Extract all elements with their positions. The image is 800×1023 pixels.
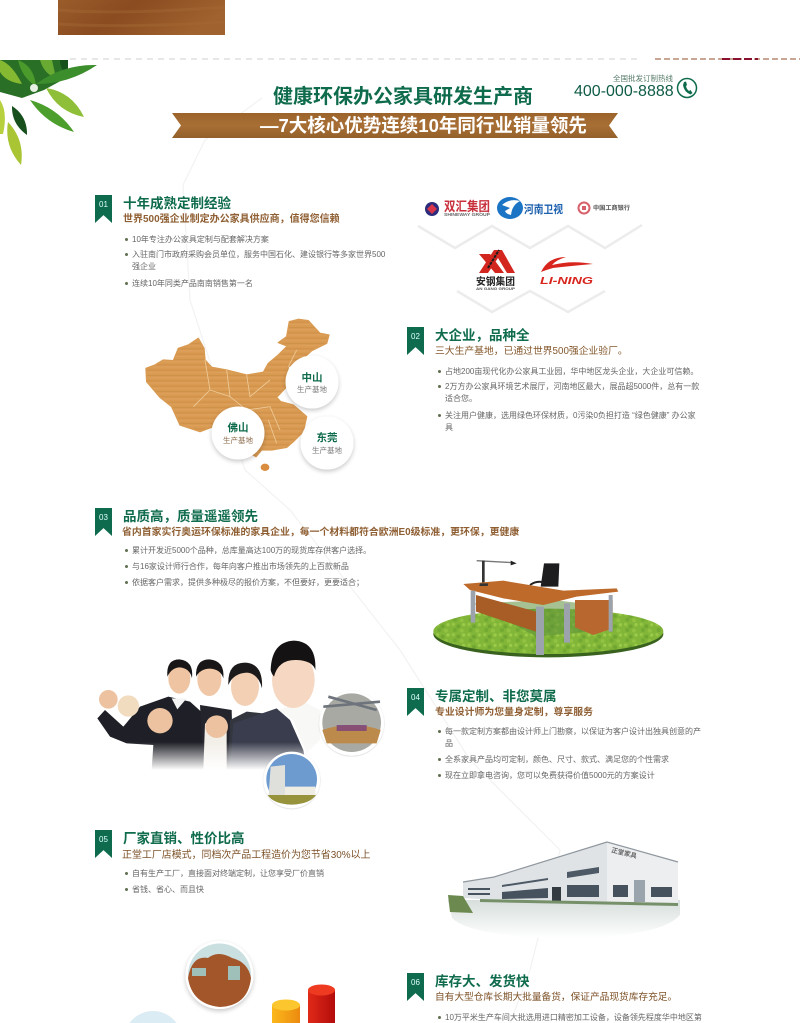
connecting line	[183, 98, 560, 1023]
circle: Zhongshan	[286, 356, 338, 408]
section 02	[407, 327, 699, 432]
logo: ICBC	[578, 202, 630, 214]
factory building	[448, 842, 680, 938]
circle: Dongguan	[300, 416, 354, 470]
hotline	[574, 74, 674, 100]
faces	[167, 641, 315, 708]
hexagon logo wall	[418, 197, 642, 312]
text: 具	[445, 423, 453, 432]
logo: Li-Ning	[540, 257, 593, 287]
section 02: 适合您。	[445, 394, 477, 403]
section 01: 十年成熟定制经验	[123, 196, 231, 211]
circle: Zhongshan: 生产基地	[297, 384, 327, 394]
factory building: 正堂家具	[611, 845, 638, 860]
circle: Dongguan: 东莞	[316, 431, 338, 444]
section 02: 三大生产基地，已通过世界500强企业验厂。	[435, 346, 628, 357]
logo: ICBC: 中国工商银行	[593, 204, 630, 212]
section 06: 06	[411, 978, 420, 987]
section 03: 省内首家实行奥运环保标准的家具企业，每一个材料都符合欧洲E0级标准，更环保，更健康	[122, 527, 519, 538]
section 05: 省钱、省心、而且快	[132, 885, 204, 894]
logo: Angang: 安钢集团	[476, 275, 515, 288]
section 01	[95, 195, 385, 288]
section 05: 正堂工厂店模式，同档次产品工程造价为您节省30%以上	[122, 850, 370, 861]
hotline: 400-000-8888	[574, 83, 674, 100]
logo: Angang	[476, 250, 516, 291]
hotline: 全国批发订制热线	[613, 74, 673, 83]
dashed divider	[70, 58, 800, 60]
person bodies	[97, 697, 320, 770]
fists	[99, 690, 228, 738]
logo: Li-Ning: LI-NING	[540, 275, 593, 287]
section 01: 强企业	[132, 262, 156, 271]
blue photo circle	[124, 1011, 182, 1023]
logo: Angang: AN GANG GROUP	[476, 287, 516, 291]
logo: Henan TV	[497, 197, 563, 219]
photo: building	[263, 752, 320, 808]
section 01: 连续10年同类产品南南销售第一名	[132, 279, 253, 288]
section 06: 10万平米生产车间大批选用进口精密加工设备，设备领先程度华中地区第	[445, 1013, 702, 1022]
section 01: 01	[99, 200, 108, 209]
circle: Dongguan: 生产基地	[312, 445, 342, 455]
section 03: 03	[99, 513, 108, 522]
section 01: 世界500强企业制定办公家具供应商，值得您信赖	[123, 214, 340, 225]
section 05: 05	[99, 835, 108, 844]
section 03: 累计开发近5000个品种，总库量高达100万的现货库存供客户选择。	[132, 546, 371, 555]
section 05	[95, 830, 370, 894]
section 02: 2万方办公家具环境艺术展厅，河南地区最大，展品超5000件，总有一款	[445, 382, 699, 391]
section 06	[407, 973, 702, 1022]
section 01: 10年专注办公家具定制与配套解决方案	[132, 235, 269, 244]
circle: Foshan	[212, 406, 264, 460]
section 02: 占地200亩现代化办公家具工业园，华中地区龙头企业，大企业可信赖。	[445, 367, 698, 376]
section 04: 全系家具产品均可定制，颜色、尺寸、款式、满足您的个性需求	[445, 755, 669, 764]
section 06: 库存大、发货快	[435, 974, 530, 989]
section 02: 关注用户健康，选用绿色环保材质，0污染0负担打造 “绿色健康” 办公家	[445, 411, 696, 420]
section 05: 自有生产工厂，直接面对终端定制，让您享受厂价直销	[132, 869, 324, 878]
section 02: 大企业，品种全	[435, 328, 530, 343]
icon: leaves	[0, 60, 97, 165]
map of China	[146, 319, 329, 471]
circle: Foshan: 生产基地	[223, 435, 253, 445]
section 04: 04	[411, 693, 420, 702]
section 03: 依据客户需求，提供多种极尽的报价方案，不但要好，更要适合；	[132, 578, 364, 587]
circle: Zhongshan: 中山	[302, 371, 322, 384]
section 04: 每一款定制方案都由设计师上门勘察，以保证为客户设计出独具创意的产	[445, 727, 701, 736]
team photo	[97, 641, 384, 808]
icon: phone	[678, 78, 696, 98]
section 03: 与16家设计师行合作，每年向客户推出市场领先的上百款新品	[132, 562, 349, 571]
section 04: 专业设计师为您量身定制，尊享服务	[435, 707, 593, 718]
logo: Henan TV: 河南卫视	[524, 203, 563, 216]
section 05: 厂家直销、性价比高	[123, 831, 244, 846]
factory circles on map	[212, 356, 354, 470]
section 04: 现在立即拿电咨询，您可以免费获得价值5000元的方案设计	[445, 771, 655, 780]
title: 健康环保办公家具研发生产商	[273, 86, 533, 108]
section 01: 入驻南门市政府采购会员单位，服务中国石化、建设银行等多家世界500	[132, 250, 385, 259]
ribbon text: —7大核心优势连续10年同行业销量领先	[260, 115, 587, 136]
wood block	[58, 0, 225, 35]
section 04: 品	[445, 739, 453, 748]
logo: Shuanghui: 双汇集团	[444, 199, 490, 214]
section 03: 品质高，质量遥遥领先	[123, 509, 258, 524]
section 04	[407, 688, 701, 780]
desk on grass	[433, 561, 663, 657]
section 04: 专属定制、非您莫属	[435, 689, 556, 704]
building photo circle	[186, 941, 254, 1009]
photo: warehouse	[319, 691, 384, 756]
logo: Shuanghui	[425, 199, 490, 217]
column chart icon	[272, 984, 335, 1023]
circle: Foshan: 佛山	[228, 421, 248, 434]
logo: Shuanghui: SHINEWAY GROUP	[444, 212, 490, 217]
section 03	[95, 508, 519, 587]
section 06: 自有大型仓库长期大批量备货，保证产品现货库存充足。	[435, 992, 677, 1003]
section 02: 02	[411, 332, 420, 341]
ribbon banner	[172, 113, 618, 138]
